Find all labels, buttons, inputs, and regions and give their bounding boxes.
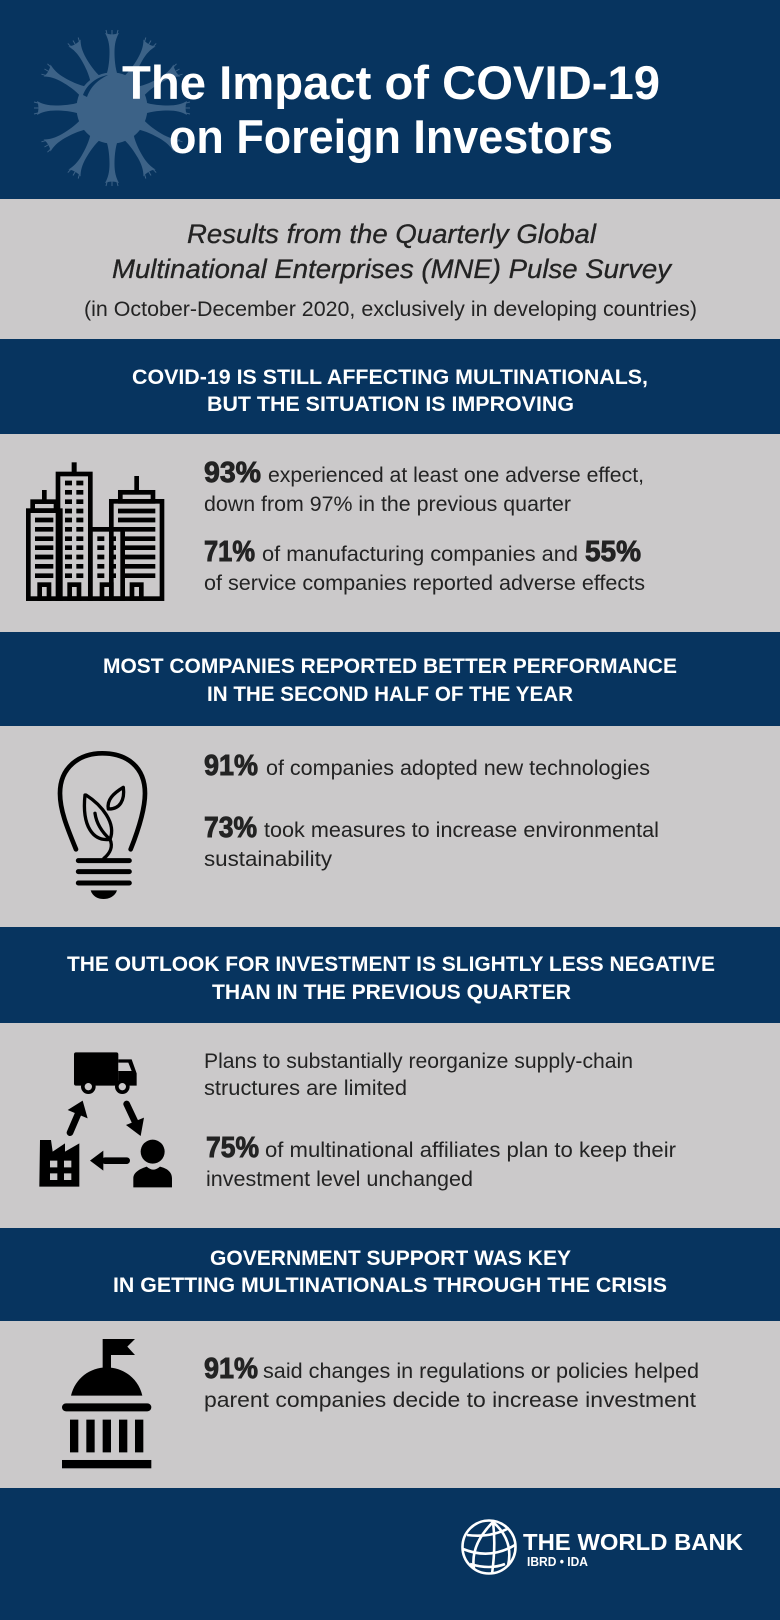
stat: 71 and 55 percent: 71% [204,536,255,568]
stat: 91 percent policy: said changes in regulations or policies helped [263,1359,699,1383]
logo: World Bank [462,1520,743,1574]
panel: heading 1: COVID-19 IS STILL AFFECTING MULTINATIONALS, [132,366,648,389]
stat: 91 percent technologies: 91% [204,750,258,782]
panel: heading 2 [0,632,780,726]
stat: 71 and 55 percent: 55% [585,536,641,568]
panel: title header [0,0,780,199]
text: supply chain plans [204,1049,633,1100]
stat: 93 percent: 93% [204,457,261,489]
panel: heading 4: GOVERNMENT SUPPORT WAS KEY [210,1247,571,1270]
panel: technology and sustainability [0,726,780,927]
title [122,56,660,163]
text: supply chain plans: Plans to substantially reorganize supply-chain [204,1049,633,1073]
stat: 75 percent investment: investment level unchanged [206,1167,473,1191]
stat: 71 and 55 percent: of manufacturing companies and [262,542,578,566]
icon: city buildings [28,462,162,599]
panel: survey subtitle [0,199,780,339]
stat: 73 percent sustainability: 73% [204,812,257,844]
stat: 75 percent investment [206,1132,676,1191]
tagline: IBRD • IDA [527,1554,589,1569]
panel: heading 3: THAN IN THE PREVIOUS QUARTER [212,981,571,1004]
icon: supply chain cycle [39,1052,172,1187]
icon: capitol building [62,1339,151,1468]
panel: heading 3: THE OUTLOOK FOR INVESTMENT IS SLIGHTLY LESS NEGATIVE [67,953,715,976]
panel: heading 4: IN GETTING MULTINATIONALS THROUGH THE CRISIS [113,1274,667,1297]
panel: investment outlook [0,1023,780,1228]
icon: coronavirus [34,30,190,186]
text: supply chain plans: structures are limited [204,1076,407,1100]
icon: globe [462,1520,516,1574]
panel: heading 1: BUT THE SITUATION IS IMPROVING [207,393,574,416]
panel: government support [0,1321,780,1488]
stat: 71 and 55 percent [204,536,645,595]
stat: 91 percent policy: parent companies decide to increase investment [204,1388,696,1412]
panel: footer [0,1488,780,1620]
stat: 75 percent investment: of multinational affiliates plan to keep their [265,1138,676,1162]
survey period note: (in October-December 2020, exclusively in developing countries) [84,297,697,321]
panel: adverse effects [0,434,780,632]
subtitle: Multinational Enterprises (MNE) Pulse Survey [112,254,673,284]
stat: 91 percent technologies [204,750,650,782]
stat: 93 percent: down from 97% in the previous quarter [204,492,571,516]
stat: 73 percent sustainability: sustainability [204,847,332,871]
stat: 73 percent sustainability [204,812,659,871]
panel: heading 3 [0,927,780,1023]
subtitle: Results from the Quarterly Global [187,219,597,249]
panel: heading 2: IN THE SECOND HALF OF THE YEAR [207,683,573,706]
stat: 91 percent technologies: of companies adopted new technologies [266,756,650,780]
stat: 93 percent [204,457,644,516]
subtitle [112,219,673,284]
panel: heading 4 [0,1228,780,1321]
panel: heading 1 [0,339,780,434]
stat: 91 percent policy: 91% [204,1353,258,1385]
stat: 91 percent policy [204,1353,699,1412]
title: The Impact of COVID-19 [122,56,660,109]
stat: 93 percent: experienced at least one adverse effect, [268,463,644,487]
stat: 75 percent investment: 75% [206,1132,259,1164]
stat: 73 percent sustainability: took measures to increase environmental [264,818,659,842]
stat: 71 and 55 percent: of service companies reported adverse effects [204,571,645,595]
icon: light bulb with leaf [60,753,145,899]
title: on Foreign Investors [169,110,613,163]
panel: heading 2: MOST COMPANIES REPORTED BETTER PERFORMANCE [103,655,677,678]
wordmark: THE WORLD BANK [523,1529,743,1555]
